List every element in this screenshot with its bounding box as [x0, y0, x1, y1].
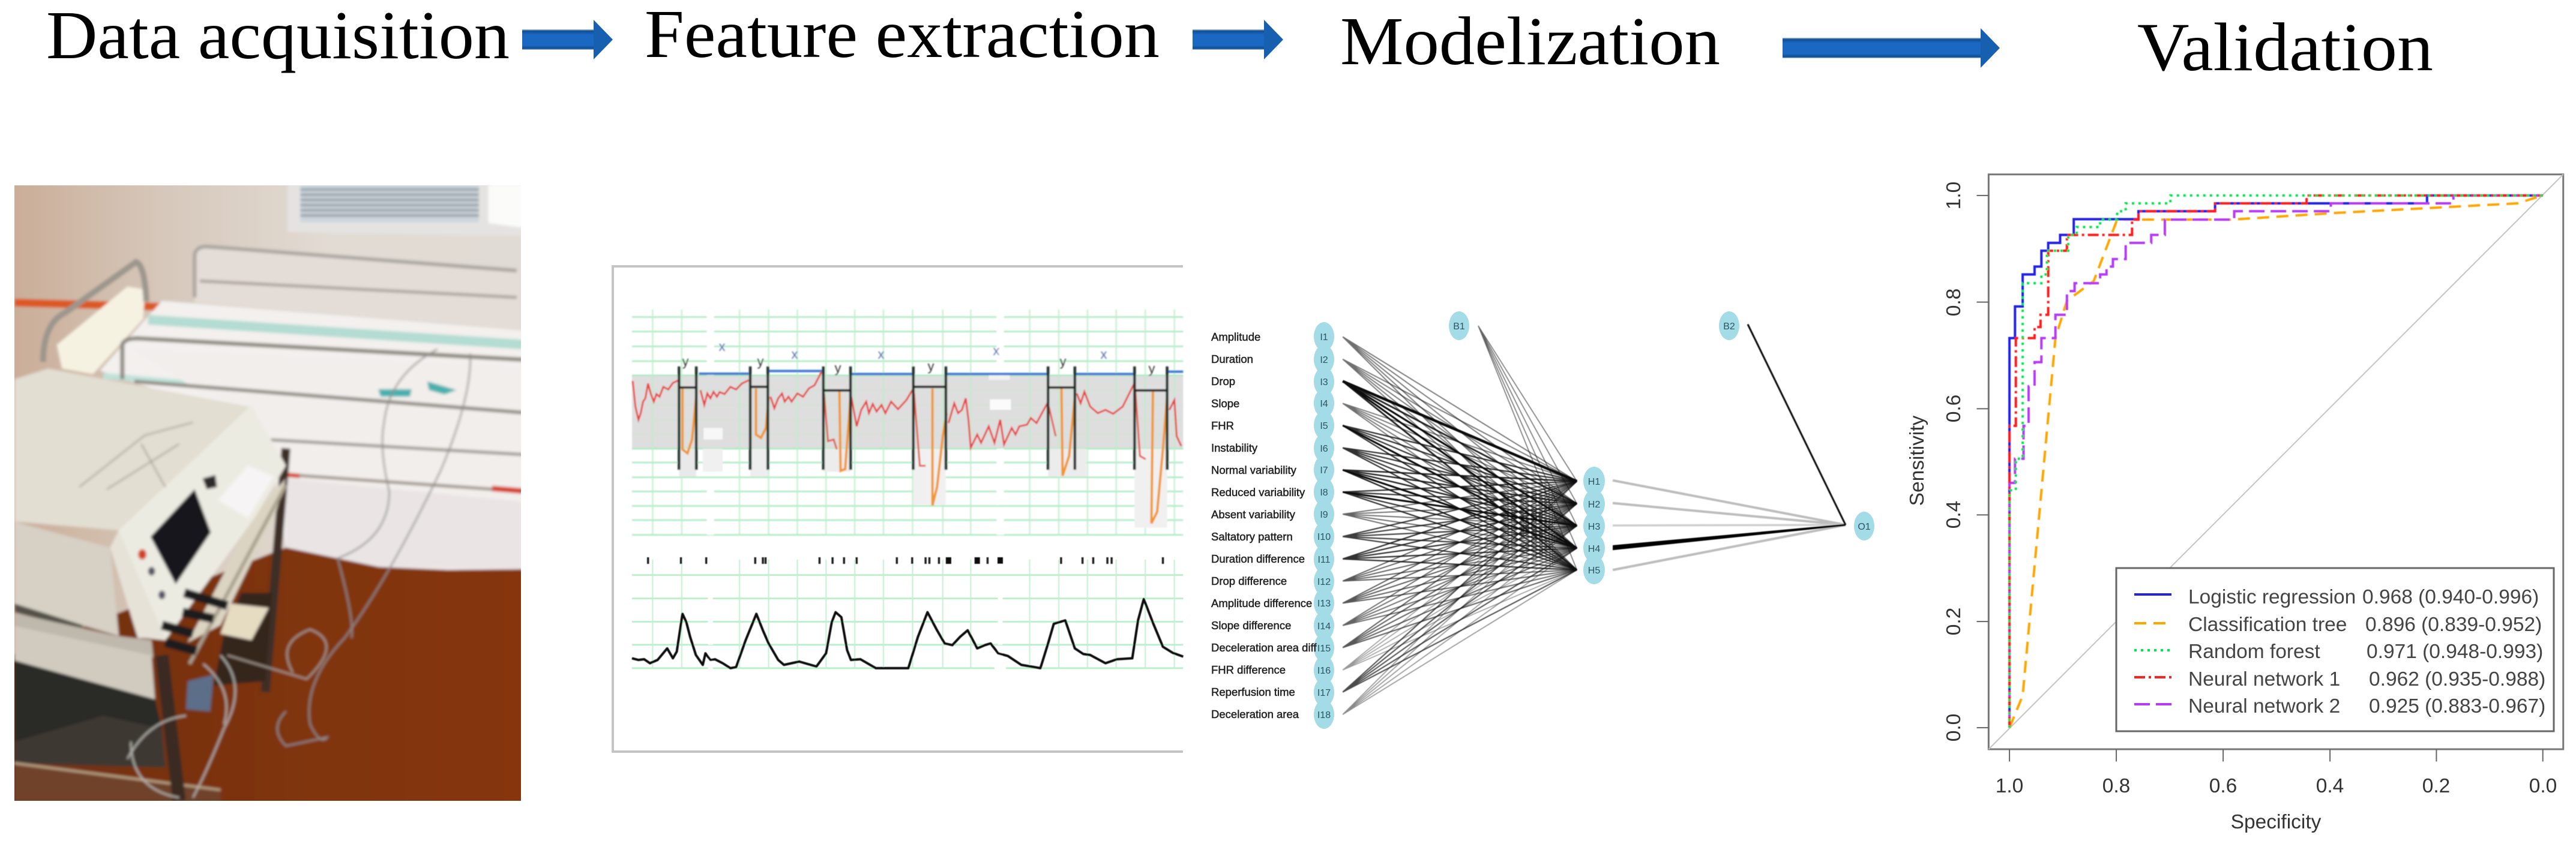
node labels: I11 — [1317, 555, 1331, 565]
input feature labels — [1211, 331, 1317, 720]
node labels: I2 — [1320, 355, 1328, 365]
x axis tick labels: 0.6 — [2209, 775, 2237, 797]
panel: ROC curves — [1906, 175, 2563, 833]
node labels: I7 — [1320, 465, 1328, 476]
input feature labels: Duration difference — [1211, 552, 1305, 565]
segment labels: x — [877, 347, 885, 362]
curve: neural network 1 — [2009, 196, 2543, 728]
node labels: H1 — [1588, 477, 1600, 487]
y axis tick labels: 0.4 — [1943, 501, 1965, 528]
node labels: H3 — [1588, 522, 1600, 532]
network connections — [1343, 325, 1846, 714]
chart: uterine contraction trace — [632, 557, 1183, 670]
segment labels: x — [1101, 347, 1107, 362]
legend: 0.971 (0.948-0.993) — [2367, 641, 2543, 663]
legend — [2116, 568, 2554, 731]
x axis tick labels: 0.8 — [2102, 775, 2130, 797]
node labels: I16 — [1317, 666, 1331, 676]
node labels: I9 — [1320, 510, 1328, 520]
node labels: I4 — [1320, 399, 1328, 409]
input feature labels: Instability — [1211, 441, 1258, 454]
node labels: I15 — [1317, 644, 1331, 654]
input feature labels: Reperfusion time — [1211, 686, 1295, 698]
input feature labels: Drop difference — [1211, 575, 1287, 587]
input feature labels: FHR — [1211, 419, 1234, 432]
node labels: I6 — [1320, 444, 1328, 454]
x axis tick labels — [1996, 775, 2557, 797]
node labels: I12 — [1317, 577, 1331, 587]
y axis tick labels: 0.0 — [1943, 714, 1965, 741]
node labels: H2 — [1588, 500, 1600, 510]
node labels: H4 — [1588, 544, 1600, 554]
plot frame and axes — [1976, 175, 2563, 761]
y axis tick labels: 0.2 — [1943, 608, 1965, 635]
panel: cardiotocography traces — [613, 266, 1183, 752]
x axis tick labels: 0.2 — [2422, 775, 2450, 797]
segment labels: x — [719, 339, 725, 354]
node labels: I13 — [1317, 599, 1331, 609]
segment labels — [682, 339, 1155, 376]
input feature labels: Amplitude — [1211, 331, 1260, 343]
legend: 0.962 (0.935-0.988) — [2369, 668, 2545, 690]
segment labels: y — [682, 354, 689, 369]
segment labels: x — [791, 347, 798, 362]
input feature labels: Absent variability — [1211, 508, 1296, 521]
ROC curve lines — [2009, 196, 2543, 728]
legend: 0.896 (0.839-0.952) — [2365, 614, 2542, 636]
heading: Validation: Validation — [2137, 9, 2433, 85]
input feature labels: Slope difference — [1211, 619, 1291, 632]
input feature labels: Amplitude difference — [1211, 597, 1312, 609]
input nodes I1 to I18 — [1314, 322, 1334, 729]
segment labels: y — [1060, 354, 1066, 369]
legend: Classification tree — [2188, 614, 2347, 636]
node labels: H5 — [1588, 566, 1600, 576]
y axis tick labels — [1943, 182, 1965, 741]
arrow: extraction to modelization — [1193, 20, 1283, 59]
x axis tick labels: 0.0 — [2529, 775, 2557, 797]
node labels: I14 — [1317, 621, 1331, 632]
input feature labels: Slope — [1211, 397, 1239, 410]
node labels: I8 — [1320, 488, 1328, 498]
input feature labels: Deceleration area diff — [1211, 641, 1317, 654]
curve: random forest — [2009, 196, 2543, 728]
y axis tick labels: 1.0 — [1943, 182, 1965, 209]
segment labels: y — [757, 354, 763, 369]
node labels: I17 — [1317, 688, 1331, 698]
legend: 0.925 (0.883-0.967) — [2369, 695, 2545, 717]
legend: Neural network 1 — [2188, 668, 2340, 690]
curve: classification tree — [2009, 196, 2543, 728]
curve: neural network 2 — [2009, 196, 2543, 728]
y axis title: Sensitivity — [1906, 415, 1928, 506]
legend: Logistic regression — [2188, 586, 2356, 608]
heading: Modelization: Modelization — [1340, 3, 1720, 79]
input feature labels: FHR difference — [1211, 663, 1286, 676]
segment labels: y — [1149, 361, 1155, 376]
node labels: I3 — [1320, 377, 1328, 388]
x axis tick labels: 0.4 — [2316, 775, 2344, 797]
panel frame — [613, 266, 1183, 752]
legend: Random forest — [2188, 641, 2320, 663]
y axis tick labels: 0.6 — [1943, 395, 1965, 422]
node labels: I5 — [1320, 421, 1328, 431]
arrow: acquisition to extraction — [522, 20, 613, 59]
chart: fetal heart rate grid and trace — [632, 310, 1183, 535]
input feature labels: Saltatory pattern — [1211, 530, 1293, 543]
input feature labels: Normal variability — [1211, 464, 1297, 476]
node labels — [1317, 322, 1871, 720]
node labels: I18 — [1317, 710, 1331, 720]
input feature labels: Reduced variability — [1211, 486, 1305, 498]
node labels: B2 — [1723, 322, 1735, 332]
x axis tick labels: 1.0 — [1996, 775, 2023, 797]
legend: Neural network 2 — [2188, 695, 2340, 717]
node labels: I10 — [1317, 532, 1331, 542]
segment labels: y — [834, 361, 841, 376]
arrow: modelization to validation — [1783, 28, 2000, 68]
segment labels: x — [993, 343, 1000, 358]
panel: photo of fetal monitor beside a bed — [14, 185, 521, 801]
curve: logistic regression — [2009, 196, 2543, 728]
input feature labels: Drop — [1211, 375, 1235, 388]
x axis title: Specificity — [2231, 811, 2322, 833]
node labels: B1 — [1453, 322, 1465, 332]
node labels: I1 — [1320, 332, 1328, 343]
input feature labels: Deceleration area — [1211, 708, 1299, 720]
input feature labels: Duration — [1211, 353, 1253, 365]
y axis tick labels: 0.8 — [1943, 289, 1965, 316]
panel: neural network diagram — [1211, 311, 1874, 729]
segment labels: y — [928, 359, 934, 374]
node labels: O1 — [1858, 522, 1871, 532]
hidden, bias and output nodes — [1449, 311, 1874, 584]
legend: 0.968 (0.940-0.996) — [2362, 586, 2539, 608]
